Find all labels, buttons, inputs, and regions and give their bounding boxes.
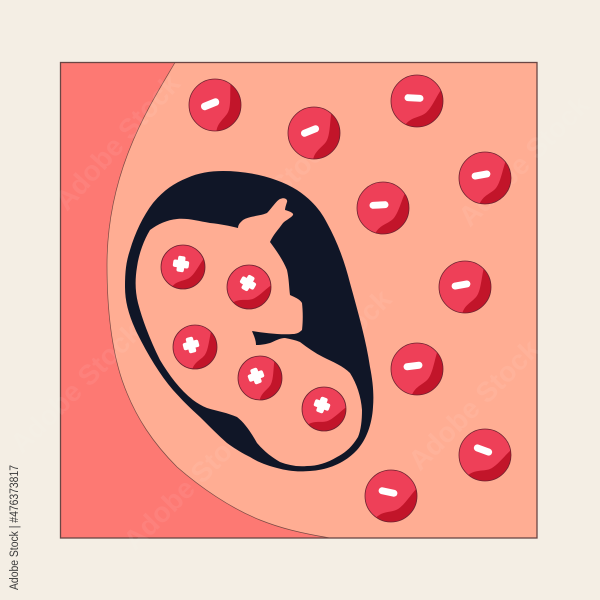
minus charge ball 8 — [458, 428, 512, 482]
plus charge ball 4 — [238, 356, 282, 400]
frame border — [60, 62, 537, 538]
watermark text: Adobe Stock — [48, 68, 186, 216]
maternal tissue: peach zone — [107, 62, 537, 538]
plus charge ball 3 — [172, 324, 218, 370]
watermark text: Adobe Stock — [402, 333, 546, 476]
panel: framed illustration — [60, 62, 537, 538]
plus charge ball 2 — [226, 264, 272, 310]
watermark text: Adobe Stock — [254, 283, 398, 426]
dark uterine cavity — [125, 171, 373, 471]
minus charge ball 7 — [390, 342, 444, 396]
fetus silhouette — [136, 198, 362, 466]
minus charge ball 2 — [288, 106, 340, 160]
minus charge ball 4 — [458, 152, 512, 204]
maternal tissue: outer red zone — [60, 62, 537, 538]
watermark text: Adobe Stock — [197, 126, 341, 269]
watermark text: Adobe Stock — [117, 413, 261, 556]
minus charge ball 3 — [390, 74, 444, 128]
watermark text: Adobe Stock — [452, 89, 596, 232]
minus charge ball 9 — [364, 470, 418, 522]
watermark text: Adobe Stock — [4, 316, 148, 459]
minus charge ball 5 — [356, 182, 410, 234]
plus charge ball 5 — [302, 386, 346, 432]
minus charge ball 6 — [438, 260, 492, 314]
plus charge ball 1 — [160, 244, 206, 290]
stock credit text: Adobe Stock | #476373817 — [9, 465, 21, 590]
minus charge ball 1 — [188, 78, 242, 132]
